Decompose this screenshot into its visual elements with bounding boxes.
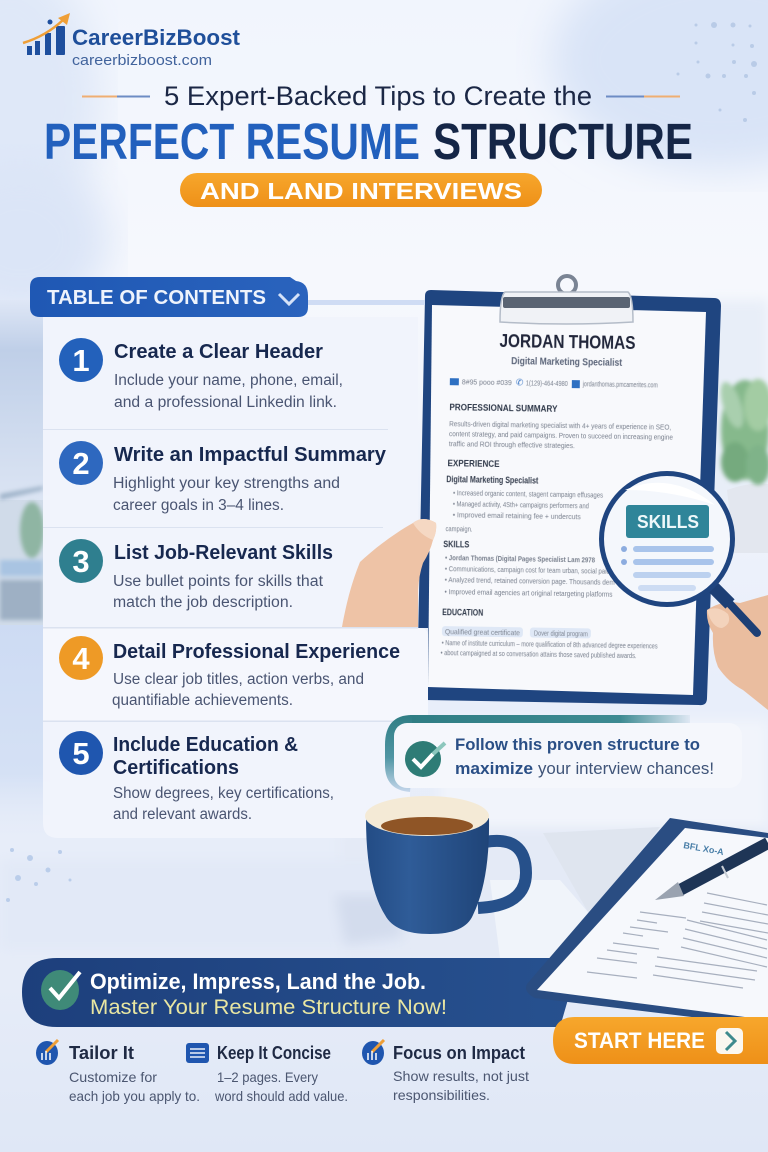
tip: keep it concise: 1–2 pages. Every <box>217 1069 318 1085</box>
skills: • Improved email agencies art original retargeting platforms <box>444 587 613 599</box>
brand name: CareerBizBoost <box>72 25 241 50</box>
tip: focus on impact: Focus on Impact <box>393 1043 525 1063</box>
skills tag <box>626 505 709 538</box>
icon: document <box>186 1043 209 1063</box>
icon: chevron <box>279 294 299 304</box>
desk resume content <box>587 840 768 988</box>
item 2: Write an Impactful Summary <box>114 444 387 466</box>
item 2 <box>59 441 387 514</box>
item 5: 5 <box>72 736 90 771</box>
item 4: 4 <box>72 641 90 676</box>
callout: follow this structure: maximize <box>455 759 533 778</box>
lens <box>602 474 732 604</box>
icon: check circle <box>405 741 445 777</box>
skills: • Jordan Thomas (Digital Pages Specialist Lam 2978 <box>445 553 595 564</box>
tip: keep it concise: word should add value. <box>214 1088 348 1104</box>
leaves <box>716 379 768 485</box>
item 3: Use bullet points for skills that <box>113 573 324 590</box>
clipboard on desk with pen <box>526 818 768 1022</box>
mug rim <box>365 796 489 836</box>
icon: banner check <box>41 970 80 1010</box>
item 5: and relevant awards. <box>113 806 252 823</box>
item 1 <box>59 338 343 411</box>
desk board <box>526 818 768 1022</box>
item 4 <box>59 636 400 709</box>
tip: focus on impact: Show results, not just <box>393 1068 529 1084</box>
table of contents tab <box>30 277 308 317</box>
tip: tailor it: each job you apply to. <box>69 1088 200 1104</box>
banner: Master Your Resume Structure Now! <box>90 996 447 1019</box>
item 3: List Job-Relevant Skills <box>114 542 333 564</box>
subtitle with rules: 5 Expert-Backed Tips to Create the <box>164 81 592 111</box>
connector rule <box>300 300 425 305</box>
professional summary <box>449 402 673 452</box>
education: Qualified great certificate <box>445 627 520 637</box>
skills tag: SKILLS <box>637 512 699 532</box>
item 2: career goals in 3–4 lines. <box>113 497 284 514</box>
icon: tailor <box>36 1040 58 1065</box>
professional summary: traffic and ROI through effective strategies. <box>449 439 575 450</box>
resume content <box>441 329 675 661</box>
resume role: Digital Marketing Specialist <box>511 355 623 369</box>
tip: tailor it: Tailor It <box>69 1043 134 1063</box>
tip: keep it concise <box>186 1043 348 1104</box>
item 3 <box>59 539 333 611</box>
coffee mug <box>335 796 526 945</box>
item 5 <box>59 731 334 823</box>
coffee <box>381 817 473 835</box>
mug handle <box>478 841 526 908</box>
pot <box>727 484 768 553</box>
icon: arrow <box>716 1028 743 1054</box>
skills: • Communications, campaign cost for team urban, social paid <box>445 564 610 576</box>
education <box>441 607 658 660</box>
item 5: Show degrees, key certifications, <box>113 785 334 802</box>
skills: • Analyzed trend, retained conversion page. Thousands dem <box>445 575 615 587</box>
callout: follow this structure <box>385 715 742 792</box>
row 4 highlight <box>43 628 428 721</box>
logo <box>23 13 241 69</box>
handle <box>712 586 757 633</box>
banner: Optimize, Impress, Land the Job. <box>90 969 426 994</box>
education: • Name of institute curriculum – more qualification of 8th advanced degree experiences <box>442 638 658 650</box>
desk paper <box>537 828 768 1020</box>
experience: • Improved email retaining fee + undercuts <box>453 510 581 521</box>
papers on desk <box>490 827 660 958</box>
experience: • Managed activity, 4Sth+ campaigns performers and <box>453 499 589 510</box>
decorative dots left <box>6 848 72 902</box>
start here button <box>553 1017 768 1064</box>
item 5: Include Education & <box>113 734 298 756</box>
item 4: quantifiable achievements. <box>112 692 293 709</box>
callout: follow this structure: your interview chances! <box>538 759 714 778</box>
magnifying glass <box>602 474 757 633</box>
table of contents tab: TABLE OF CONTENTS <box>47 287 266 309</box>
clipboard board <box>417 290 721 705</box>
pen <box>655 843 768 900</box>
education: Dover digital program <box>534 629 588 638</box>
education: • about campaigned at so conversation attains those saved published awards. <box>441 648 637 660</box>
icon: bar chart with arrow <box>23 13 70 55</box>
experience <box>445 458 604 536</box>
clipboard with resume <box>417 276 721 705</box>
decorative dots top right <box>676 22 757 122</box>
plant and pot, right <box>716 379 768 553</box>
item 2: Highlight your key strengths and <box>113 475 340 492</box>
item 4: Detail Professional Experience <box>113 641 400 663</box>
tip: focus on impact <box>362 1040 529 1103</box>
mug shadow <box>335 895 405 945</box>
brand url: careerbizboost.com <box>72 52 212 69</box>
item 3: 3 <box>72 544 90 579</box>
banner <box>22 958 580 1027</box>
callout: follow this structure: Follow this proven structure to <box>455 735 700 754</box>
resume name: JORDAN THOMAS <box>499 330 636 353</box>
desk resume content: BFL Xo-A <box>683 840 725 857</box>
background window and plant, left <box>0 486 44 620</box>
contact row <box>450 376 658 389</box>
contact row: 1(129)-464-4980 <box>526 378 568 388</box>
item 3: match the job description. <box>113 594 293 611</box>
right hand holding magnifier <box>707 595 768 710</box>
title: PERFECT RESUME <box>44 113 420 170</box>
panel body <box>43 317 428 838</box>
orange subtitle pill <box>180 173 542 207</box>
item 1: and a professional Linkedin link. <box>114 394 337 411</box>
item 4: Use clear job titles, action verbs, and <box>113 671 364 688</box>
contact row: ✆ <box>516 377 524 387</box>
contact row: jordanthomas.pmcamerites.com <box>582 379 658 389</box>
table of contents panel <box>30 277 428 838</box>
professional summary: content strategy, and paid campaigns. Proven to succeed on increasing engine <box>449 429 673 442</box>
title: STRUCTURE <box>433 113 693 170</box>
contact row: 8#95 pooo #039 <box>462 377 512 387</box>
orange subtitle pill: AND LAND INTERVIEWS <box>200 178 522 204</box>
skills: SKILLS <box>443 539 469 551</box>
experience: • Increased organic content, stagent campaign effusages <box>453 488 603 500</box>
item 2: 2 <box>72 446 90 481</box>
row dividers <box>43 429 428 722</box>
start here button: START HERE <box>574 1028 705 1053</box>
professional summary: PROFESSIONAL SUMMARY <box>449 402 558 415</box>
experience: Digital Marketing Specialist <box>446 474 538 486</box>
lens bars <box>621 546 714 591</box>
skills <box>442 539 615 599</box>
item 1: Create a Clear Header <box>114 341 323 363</box>
clip <box>500 276 633 324</box>
tip: keep it concise: Keep It Concise <box>217 1043 331 1063</box>
item 1: Include your name, phone, email, <box>114 372 343 389</box>
experience: campaign. <box>445 524 473 534</box>
paper <box>428 305 706 695</box>
left hand holding clipboard <box>342 519 436 627</box>
mug body <box>366 818 489 934</box>
icon: impact <box>362 1040 384 1065</box>
education: EDUCATION <box>442 607 483 619</box>
tip: tailor it <box>36 1040 200 1104</box>
tip: focus on impact: responsibilities. <box>393 1087 490 1103</box>
tip: tailor it: Customize for <box>69 1069 157 1085</box>
experience: EXPERIENCE <box>447 458 500 470</box>
item 5: Certifications <box>113 757 239 779</box>
professional summary: Results-driven digital marketing specialist with 4+ years of experience in SEO, <box>449 419 671 432</box>
item 1: 1 <box>72 343 90 378</box>
